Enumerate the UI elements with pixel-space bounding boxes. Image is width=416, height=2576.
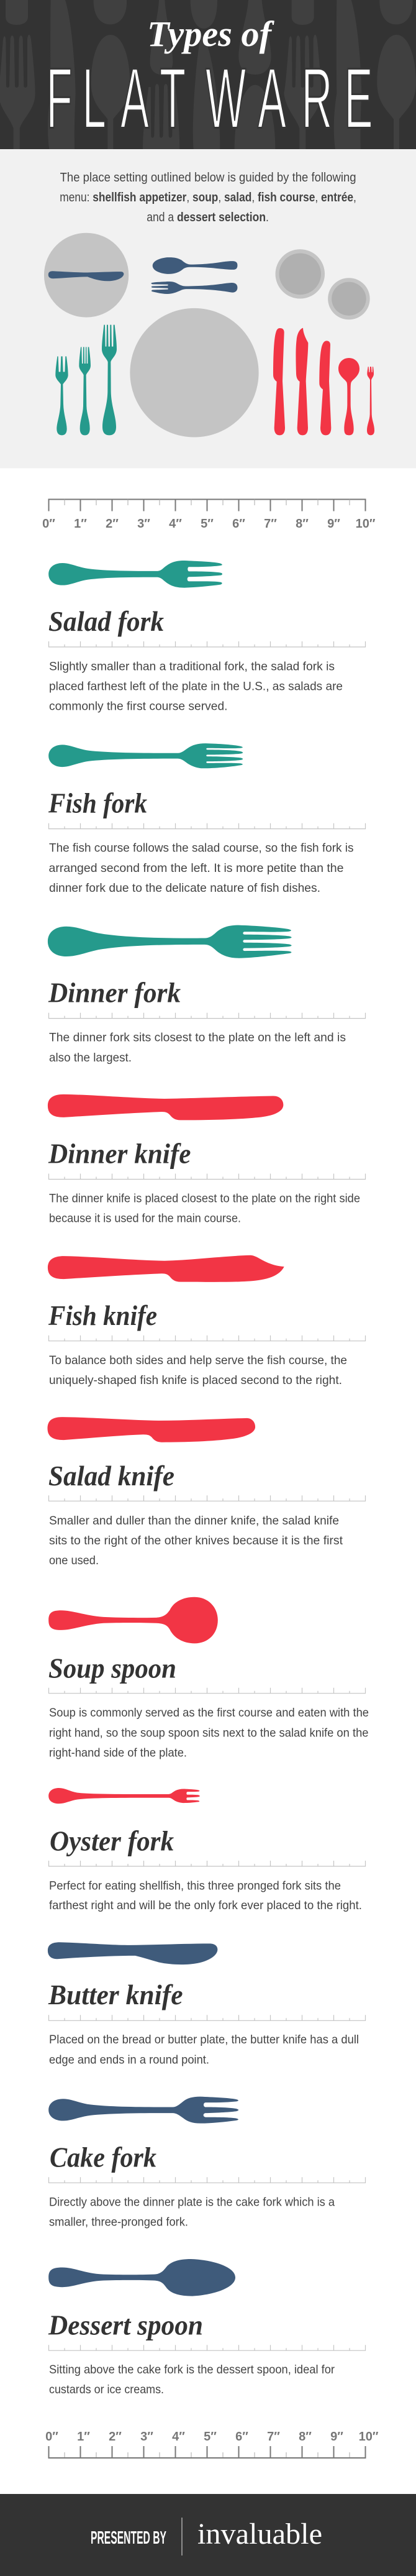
intro text xyxy=(60,171,356,224)
description xyxy=(49,1706,369,1760)
heading: Salad fork xyxy=(48,606,164,637)
icon: dinner knife xyxy=(48,1094,283,1120)
top ruler: 1″ xyxy=(74,517,87,531)
forks on the left xyxy=(55,325,117,435)
panel: oyster fork xyxy=(48,1788,366,1912)
description xyxy=(48,841,354,895)
heading: Butter knife xyxy=(48,1979,183,2010)
butter knife on plate xyxy=(48,271,124,281)
description: placed farthest left of the plate in the U.S., as salads are xyxy=(49,679,343,693)
top ruler xyxy=(42,500,376,531)
icon: fish knife xyxy=(48,1255,284,1282)
dessert spoon setting xyxy=(153,257,237,274)
description: Soup is commonly served as the first course and eaten with the xyxy=(49,1706,369,1720)
bottom ruler: 7″ xyxy=(267,2430,280,2444)
description: uniquely-shaped fish knife is placed second to the right. xyxy=(49,1373,342,1387)
bottom ruler: 2″ xyxy=(109,2430,122,2444)
description xyxy=(49,2195,335,2229)
title: Types of: Types of xyxy=(147,14,275,54)
heading: Fish knife xyxy=(48,1300,157,1331)
description: custards or ice creams. xyxy=(49,2383,164,2396)
heading: Dessert spoon xyxy=(48,2309,203,2340)
description: commonly the first course served. xyxy=(49,700,227,713)
description: because it is used for the main course. xyxy=(49,1212,241,1226)
panel: dinner fork xyxy=(48,925,365,1065)
bottom ruler: 8″ xyxy=(299,2430,312,2444)
top ruler: 2″ xyxy=(106,517,119,531)
intro text: menu: shellfish appetizer, soup, salad, fish course, entrée, xyxy=(60,191,356,204)
heading: Oyster fork xyxy=(50,1825,174,1856)
bottom ruler: 9″ xyxy=(330,2430,343,2444)
invaluable logo: invaluable xyxy=(197,2518,322,2551)
heading: Cake fork xyxy=(50,2142,156,2173)
heading: Fish fork xyxy=(48,788,147,819)
description: sits to the right of the other knives because it is the first xyxy=(49,1534,343,1547)
wine glass xyxy=(328,278,370,319)
description: edge and ends in a round point. xyxy=(49,2053,209,2067)
icon: dinner fork xyxy=(48,925,292,958)
bottom ruler xyxy=(45,2430,379,2458)
top ruler: 9″ xyxy=(327,517,340,531)
footer xyxy=(0,2494,416,2576)
panel: soup spoon xyxy=(48,1597,369,1760)
description xyxy=(49,2033,359,2067)
panel: place setting xyxy=(0,149,416,469)
description: The dinner fork sits closest to the plate on the left and is xyxy=(49,1031,346,1045)
description: Placed on the bread or butter plate, the butter knife has a dull xyxy=(49,2033,359,2047)
top ruler: 4″ xyxy=(169,517,182,531)
icon: oyster fork xyxy=(48,1788,200,1804)
top ruler: 10″ xyxy=(356,517,376,531)
heading: Dinner fork xyxy=(48,978,181,1009)
description xyxy=(49,659,343,713)
bottom ruler: 0″ xyxy=(45,2430,58,2444)
heading: Salad knife xyxy=(48,1460,174,1492)
icon: soup spoon xyxy=(48,1597,218,1643)
presented by label: PRESENTED BY xyxy=(91,2528,166,2548)
top ruler: 8″ xyxy=(296,517,309,531)
description xyxy=(49,2363,335,2396)
icon: fish fork xyxy=(48,743,243,768)
description: farthest right and will be the only fork ever placed to the right. xyxy=(49,1899,362,1912)
dinner plate xyxy=(130,308,259,437)
description: right hand, so the soup spoon sits next to the salad knife on the xyxy=(49,1726,369,1739)
top ruler: 6″ xyxy=(232,517,245,531)
heading: Dinner knife xyxy=(48,1139,191,1170)
top ruler: 7″ xyxy=(264,517,277,531)
bottom ruler: 5″ xyxy=(204,2430,217,2444)
bottom ruler: 4″ xyxy=(172,2430,185,2444)
top ruler: 3″ xyxy=(137,517,150,531)
description xyxy=(49,1879,362,1912)
description: Perfect for eating shellfish, this three pronged fork sits the xyxy=(49,1879,341,1892)
bottom ruler: 3″ xyxy=(140,2430,153,2444)
title: FLATWARE: FLATWARE xyxy=(46,51,373,147)
panel: butter knife xyxy=(48,1942,365,2067)
description xyxy=(49,1192,360,1226)
plates and top flatware xyxy=(44,233,370,437)
description: The fish course follows the salad course, so the fish fork is xyxy=(49,841,354,855)
panel: cake fork xyxy=(48,2097,366,2229)
description xyxy=(49,1031,346,1065)
bread plate xyxy=(44,233,129,318)
description: Slightly smaller than a traditional fork, the salad fork is xyxy=(49,659,335,673)
description: Smaller and duller than the dinner knife, the salad knife xyxy=(49,1514,339,1528)
cake fork setting xyxy=(151,282,237,294)
description xyxy=(49,1354,347,1387)
panel: fish knife xyxy=(48,1255,365,1387)
description: Directly above the dinner plate is the cake fork which is a xyxy=(49,2195,335,2209)
knives and spoon on the right xyxy=(273,328,374,435)
description: The dinner knife is placed closest to the plate on the right side xyxy=(49,1192,360,1206)
intro text: and a dessert selection. xyxy=(147,211,269,224)
header panel xyxy=(0,0,416,149)
top ruler: 5″ xyxy=(201,517,214,531)
description: smaller, three-pronged fork. xyxy=(49,2215,188,2229)
description: right-hand side of the plate. xyxy=(49,1746,187,1760)
icon: cake fork xyxy=(48,2097,238,2124)
description xyxy=(49,1514,343,1567)
icon: salad knife xyxy=(47,1417,255,1442)
icon: salad fork xyxy=(48,561,222,588)
intro text: The place setting outlined below is guided by the following xyxy=(60,171,356,185)
description: Sitting above the cake fork is the dessert spoon, ideal for xyxy=(49,2363,335,2377)
description: also the largest. xyxy=(49,1051,132,1065)
panel: fish fork xyxy=(48,743,366,895)
bottom ruler: 6″ xyxy=(235,2430,248,2444)
panel: dessert spoon xyxy=(48,2259,366,2396)
description: To balance both sides and help serve the fish course, the xyxy=(49,1354,347,1367)
description: one used. xyxy=(49,1554,99,1567)
bottom ruler: 1″ xyxy=(77,2430,90,2444)
description: dinner fork due to the delicate nature of fish dishes. xyxy=(49,881,320,895)
top ruler: 0″ xyxy=(42,517,55,531)
bottom ruler: 10″ xyxy=(359,2430,379,2444)
icon: butter knife xyxy=(48,1942,217,1964)
icon: dessert spoon xyxy=(48,2259,235,2296)
description: arranged second from the left. It is more petite than the xyxy=(48,861,344,875)
heading: Soup spoon xyxy=(48,1652,176,1684)
panel: salad fork xyxy=(48,561,365,713)
water glass xyxy=(276,249,325,299)
panel: dinner knife xyxy=(48,1094,365,1226)
panel: salad knife xyxy=(47,1417,366,1567)
